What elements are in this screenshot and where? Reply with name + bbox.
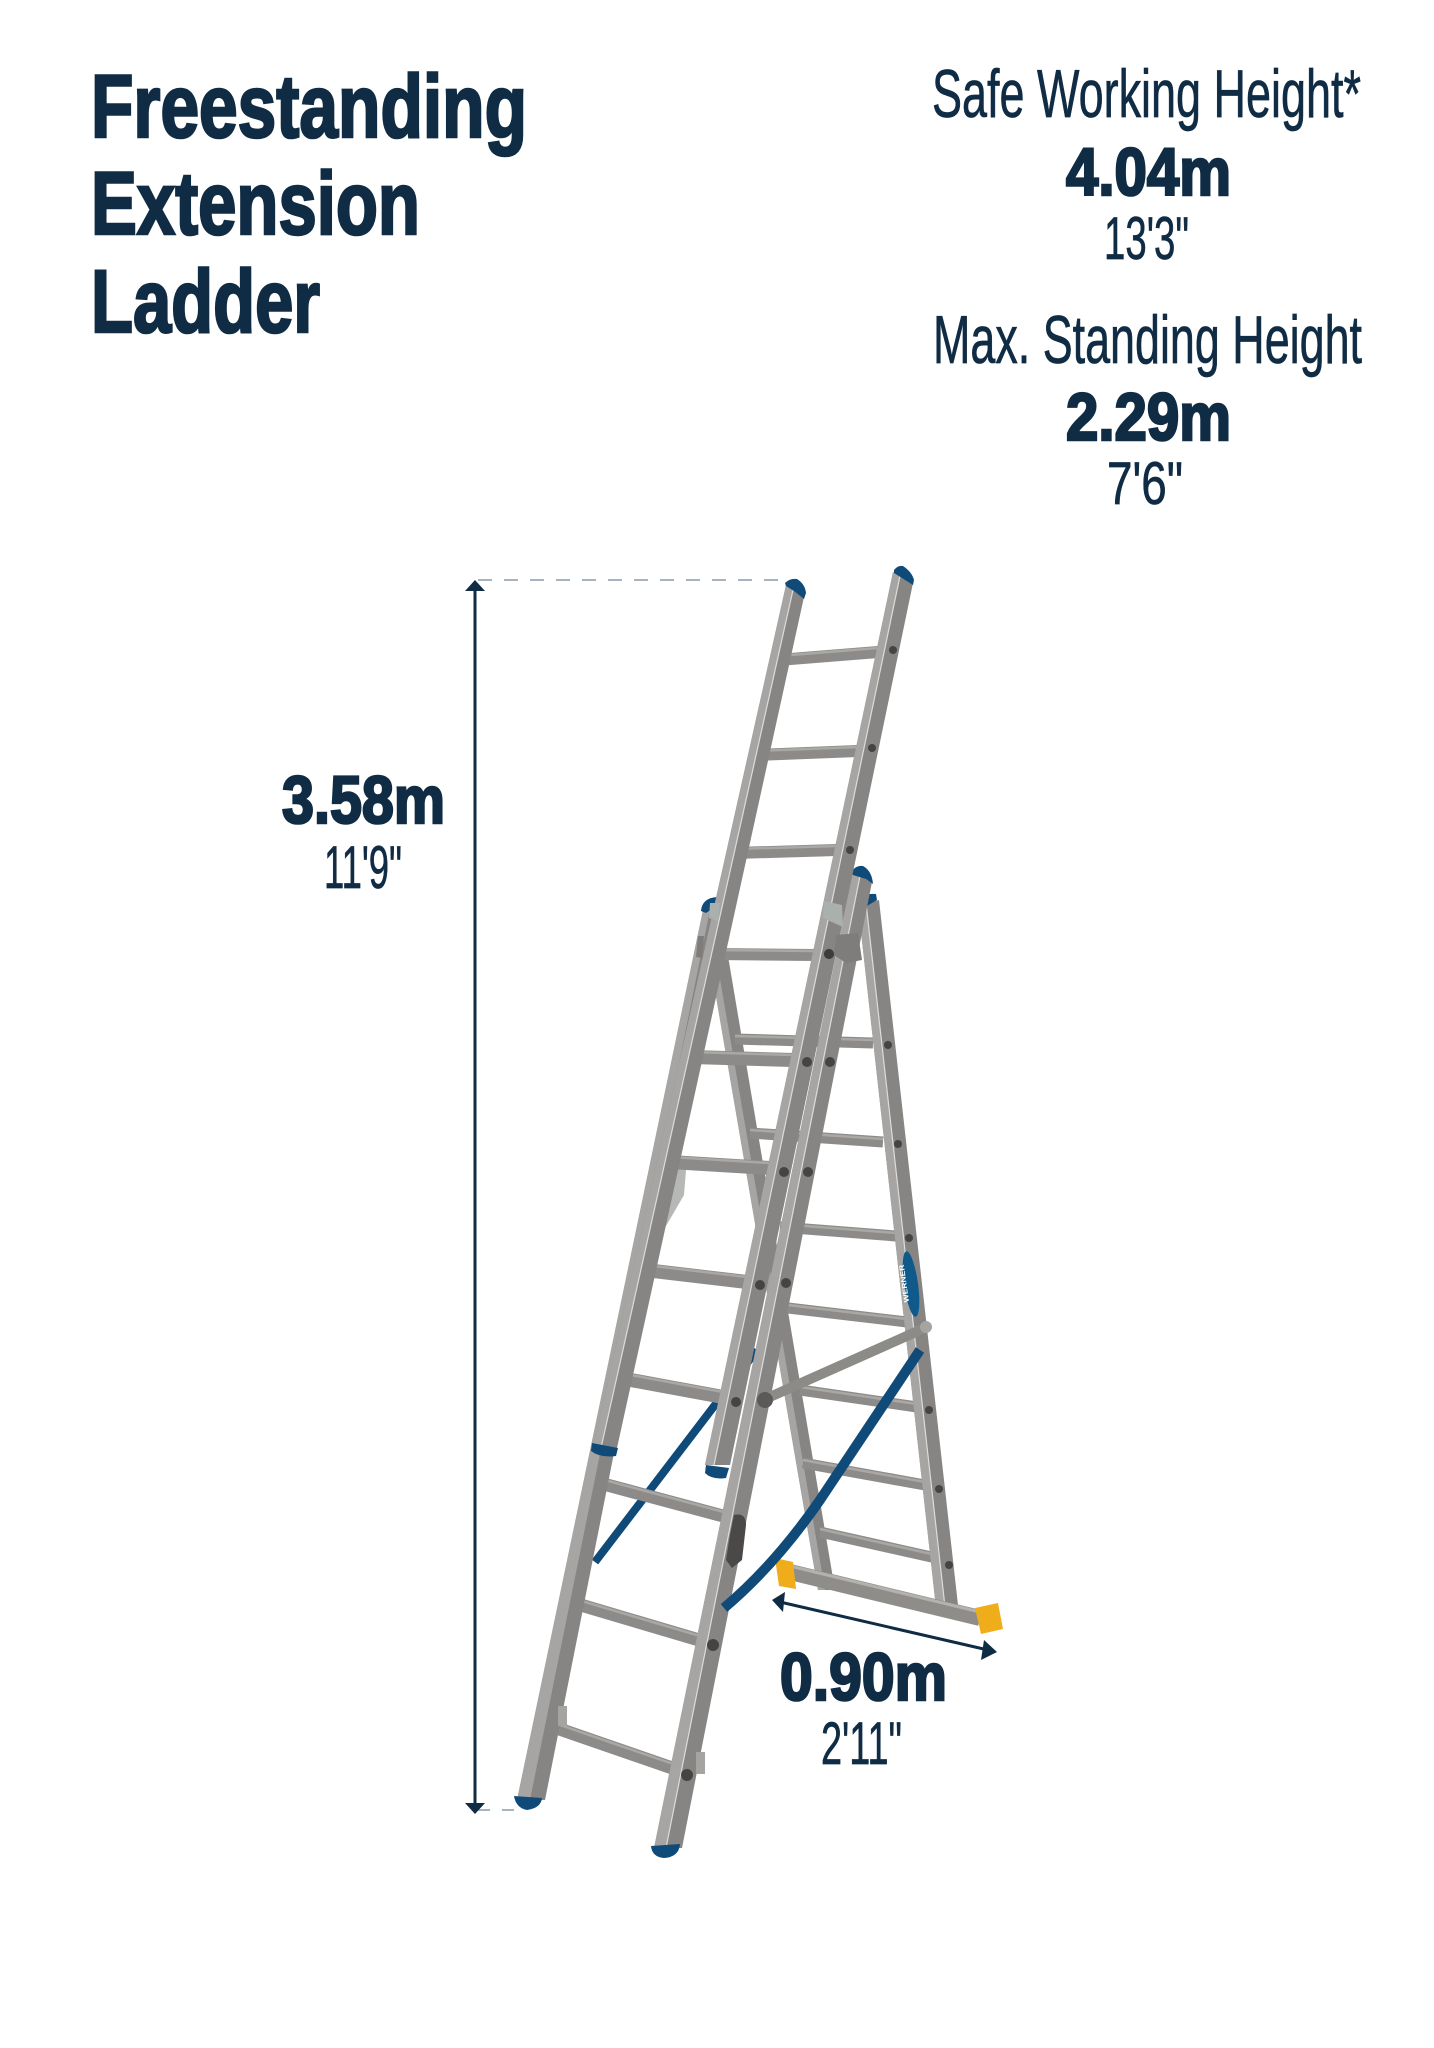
width label: 0.90m bbox=[780, 1640, 947, 1715]
back section bbox=[708, 894, 958, 1608]
left strap bbox=[595, 1350, 757, 1562]
upper section bbox=[591, 566, 914, 1478]
stabiliser strut bbox=[757, 1321, 932, 1408]
title: Ladder bbox=[91, 251, 320, 351]
width label: 2'11" bbox=[821, 1710, 902, 1777]
logo label: WERNER bbox=[899, 1264, 911, 1303]
latch and hooks bbox=[558, 1168, 746, 1774]
spec: safe working height bbox=[932, 56, 1361, 272]
stabiliser bar bbox=[775, 1558, 1003, 1634]
spec: max standing height: 7'6" bbox=[1107, 450, 1183, 517]
spec: safe working height: 4.04m bbox=[1066, 135, 1231, 210]
title: Freestanding bbox=[91, 56, 527, 156]
width label bbox=[780, 1640, 947, 1777]
clips and brackets bbox=[696, 901, 862, 963]
spec: safe working height: 13'3" bbox=[1104, 205, 1189, 272]
height label bbox=[282, 763, 445, 901]
spec: max standing height bbox=[933, 302, 1362, 517]
width dimension arrow bbox=[772, 1592, 997, 1660]
front section bbox=[514, 866, 873, 1858]
ladder bbox=[514, 566, 1003, 1858]
right strap bbox=[724, 1350, 920, 1608]
logo label bbox=[899, 1250, 923, 1318]
height dimension arrow bbox=[465, 580, 790, 1814]
title bbox=[91, 56, 527, 351]
height label: 3.58m bbox=[282, 763, 445, 838]
spec: max standing height: 2.29m bbox=[1066, 380, 1231, 455]
title: Extension bbox=[91, 153, 420, 253]
height label: 11'9" bbox=[324, 834, 402, 901]
